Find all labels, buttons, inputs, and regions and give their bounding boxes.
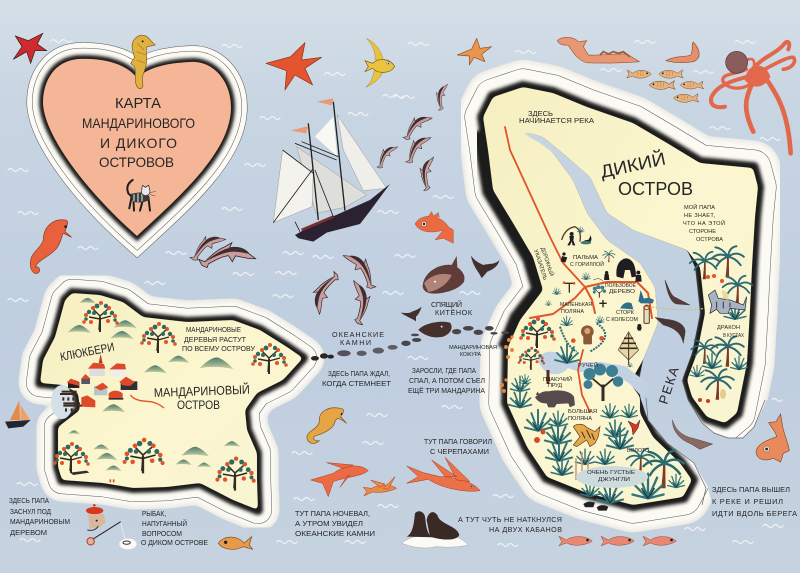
icon: flying fish pair [311, 463, 397, 497]
red path lines [505, 127, 652, 412]
icon: orange spiny fish [415, 212, 453, 243]
icon: crocodile upper [665, 280, 690, 305]
trees by meadow [509, 317, 579, 408]
tall cone tree [618, 332, 639, 367]
note: father waited [322, 369, 392, 388]
school of small fish [627, 70, 704, 102]
icon: octopus [711, 42, 795, 153]
note: boars: НА ДВУХ КАБАНОВ [489, 525, 562, 534]
icon: sea serpent tail [666, 42, 699, 63]
labels inside wild island [519, 109, 744, 483]
tiger [573, 424, 600, 447]
dry-land notes between islands [9, 300, 797, 547]
title text [82, 95, 195, 170]
dolphins group center [310, 247, 385, 327]
icon: crocodile lower [673, 420, 713, 449]
labels inside wild island: БОЛЬШАЯ [568, 409, 597, 415]
note: thicket: СПАЛ, А ПОТОМ СЪЕЛ [409, 376, 485, 385]
labels inside wild island: ПЛАКУЧИЙ [543, 375, 572, 383]
labels inside wild island: ДРАКОН [717, 325, 740, 331]
labels inside wild island: МОЙ ПАПА [684, 203, 715, 211]
title text: И ДИКОГО [100, 135, 177, 151]
harbour water [51, 385, 73, 419]
river edge lines [646, 380, 765, 505]
swamp water [576, 466, 648, 488]
title text: КАРТА [115, 95, 161, 112]
labels inside wild island: БОЛОТО [627, 448, 650, 454]
note: fisherman: РЫБАК, [142, 509, 166, 518]
panel: Wild island [483, 87, 800, 515]
jungle palms and bushes [525, 404, 684, 503]
road rope to dragon [652, 307, 705, 310]
labels inside wild island: ПАЛЬМА [573, 255, 598, 261]
title text: МАНДАРИНОВОГО [82, 115, 195, 131]
note: sleeping whale [431, 300, 473, 317]
note: along the shore: ИДТИ ВДОЛЬ БЕРЕГА [712, 509, 797, 518]
note: overnight: ОКЕАНСКИЕ КАМНИ [295, 529, 375, 538]
note: slept under tree: ЗАСНУЛ ПОД [10, 507, 51, 516]
icon: small sailboat [5, 401, 31, 428]
note: along the shore: К РЕКЕ И РЕШИЛ [712, 497, 783, 506]
pond and stream [538, 352, 650, 397]
mandarin peel dots on shore [500, 335, 514, 393]
harbour piers [60, 392, 82, 412]
labels inside wild island: ЗДЕСЬ [528, 109, 553, 118]
label: ocean stones: ОКЕАНСКИЕ [332, 330, 384, 339]
labels inside wild island: УКАЗАТЕЛЬ [532, 249, 548, 281]
labels inside wild island: ДОРОЖНЫЙ [539, 246, 556, 277]
labels inside wild island: В КУСТАХ [723, 333, 744, 339]
note: thicket [408, 366, 485, 395]
icon: small orange starfish [457, 38, 492, 65]
icon: bottom-left goldfish [218, 537, 253, 549]
panel: heart title cartouche [43, 59, 231, 236]
label: Cranberry town: КЛЮКБЕРИ [59, 340, 116, 364]
mandarin trees [53, 301, 288, 491]
note: slept under tree: МАНДАРИНОВЫМ [10, 517, 70, 526]
river channel [513, 128, 800, 515]
labels inside wild island: ПОЛЯНА [561, 309, 584, 315]
blue round tree [584, 364, 623, 401]
note: fisherman: НАПУГАННЫЙ [142, 519, 187, 528]
note: slept under tree: ЗДЕСЬ ПАПА [9, 496, 49, 505]
labels inside wild island: С ГОРИЛЛОЙ [570, 260, 604, 268]
hills [68, 298, 240, 471]
note: father waited: ЗДЕСЬ ПАПА ЖДАЛ, [328, 369, 390, 378]
icon: sailing ship [273, 98, 390, 242]
labels inside wild island: СТОРК [616, 310, 635, 316]
icon: fisherman [86, 504, 137, 549]
icon: diving whale tail [401, 307, 422, 321]
labels inside wild island: РУЧЕЙ [578, 361, 598, 369]
village houses [67, 354, 164, 408]
note: fisherman [141, 509, 208, 547]
icon: large flying fish [407, 457, 480, 491]
note: thicket: ЗАРОСЛИ, ГДЕ ПАПА [412, 366, 476, 375]
icon: whale [423, 256, 465, 294]
note: mandarin trees: МАНДАРИНОВЫЕ [186, 325, 241, 334]
labels inside wild island: ЧТО НА ЭТОЙ [683, 219, 725, 227]
note: mandarin peel: МАНДАРИНОВАЯ [449, 345, 497, 351]
note: fisherman: О ДИКОМ ОСТРОВЕ [141, 538, 208, 547]
labels inside wild island: МАЛЕНЬКАЯ [560, 302, 592, 308]
note: slept under tree [9, 496, 70, 537]
icon: orange starfish [266, 43, 322, 90]
label: ocean stones [332, 330, 384, 347]
icon: sea serpent [557, 37, 639, 63]
icon: seals on ice [402, 511, 468, 548]
label: ocean stones: КАМНИ [340, 338, 371, 347]
note: overnight: ТУТ ПАПА НОЧЕВАЛ, [295, 509, 370, 518]
icon: whale tail [471, 256, 499, 278]
note: mandarin trees [182, 325, 255, 353]
label: river: РЕКА [656, 365, 682, 406]
note: slept under tree: ДЕРЕВОМ [10, 528, 47, 537]
note: along the shore: ЗДЕСЬ ПАПА ВЫШЕЛ [712, 485, 790, 494]
icon: big orange fish [756, 414, 789, 462]
label: Mandarin island name: МАНДАРИНОВЫЙ [154, 382, 250, 400]
icon: golden seahorse [307, 408, 347, 443]
ocean stones [311, 326, 509, 361]
note: turtles: С ЧЕРЕПАХАМИ [430, 447, 489, 456]
title text: ОСТРОВОВ [99, 154, 174, 170]
panel: Mandarin island [40, 293, 303, 510]
icon: yellow seahorse on heart [131, 35, 155, 89]
note: mandarin trees: ПО ВСЕМУ ОСТРОВУ [182, 344, 255, 353]
labels inside wild island: НЕ ЗНАЕТ, [684, 213, 715, 219]
labels inside wild island: ДЖУНГЛИ [598, 477, 630, 483]
heavy shadow on west shore [483, 130, 543, 350]
label: Mandarin island name [154, 382, 250, 412]
lion clearing [560, 316, 605, 352]
dolphins group left [185, 231, 257, 274]
label: Mandarin island name: ОСТРОВ [177, 398, 220, 412]
labels inside wild island: НАЧИНАЕТСЯ РЕКА [519, 116, 594, 125]
note: turtles: ТУТ ПАПА ГОВОРИЛ [424, 437, 492, 446]
icon: orange seahorse [30, 220, 72, 273]
labels inside wild island: ДЕРЕВО [609, 289, 636, 295]
labels inside wild island: ОСТРОВ [618, 179, 693, 199]
icon: crocodile middle [655, 317, 685, 343]
note: fisherman: ВОПРОСОМ [142, 529, 182, 538]
note: sleeping whale: СПЯЩИЙ [431, 300, 462, 309]
labels inside wild island: ОЧЕНЬ ГУСТЫЕ [587, 470, 635, 476]
labels inside wild island: ДИКИЙ [598, 148, 667, 182]
tree with signpost [545, 281, 654, 331]
labels inside wild island: СТОРОНЕ [689, 229, 716, 235]
small figures under tree [70, 471, 114, 482]
icon: yellow flying fish [365, 38, 395, 87]
note: mandarin peel: КОЖУРА [460, 352, 481, 358]
icon: dragon in bushes [708, 290, 747, 313]
icon: boars [583, 502, 608, 511]
note: overnight [295, 509, 375, 538]
note: mandarin trees: ДЕРЕВЬЯ РАСТУТ [184, 335, 247, 344]
note: boars: А ТУТ ЧУТЬ НЕ НАТКНУЛСЯ [458, 515, 562, 524]
icon: sleeping whale calf [418, 322, 452, 337]
palms in dragon thicket [690, 246, 752, 403]
note: father waited: КОГДА СТЕМНЕЕТ [322, 379, 392, 388]
labels inside wild island: С КОЛЕСОМ [606, 317, 638, 323]
note: turtles [424, 437, 492, 456]
note: sleeping whale: КИТЁНОК [435, 308, 473, 317]
icon: red starfish [13, 33, 47, 63]
note: thicket: ЕЩЁ ТРИ МАНДАРИНА [408, 386, 485, 395]
labels inside wild island: ПРУД [548, 383, 562, 389]
note: overnight: А УТРОМ УВИДЕЛ [295, 519, 363, 528]
island land [483, 87, 758, 505]
labels inside wild island: ПОЛЬЗОВОЕ [605, 283, 636, 289]
labels inside wild island: ОСТРОВА [696, 237, 723, 243]
gorilla and palm group [561, 227, 642, 282]
note: mandarin peel [449, 345, 497, 358]
rhinoceros [535, 390, 575, 407]
row of red fish [559, 536, 676, 546]
labels inside wild island: ПОЛЯНА [568, 416, 592, 422]
note: boars [458, 515, 562, 534]
icon: striped cat [127, 180, 156, 211]
dolphins group top right [371, 81, 454, 193]
note: along the shore [712, 485, 797, 518]
